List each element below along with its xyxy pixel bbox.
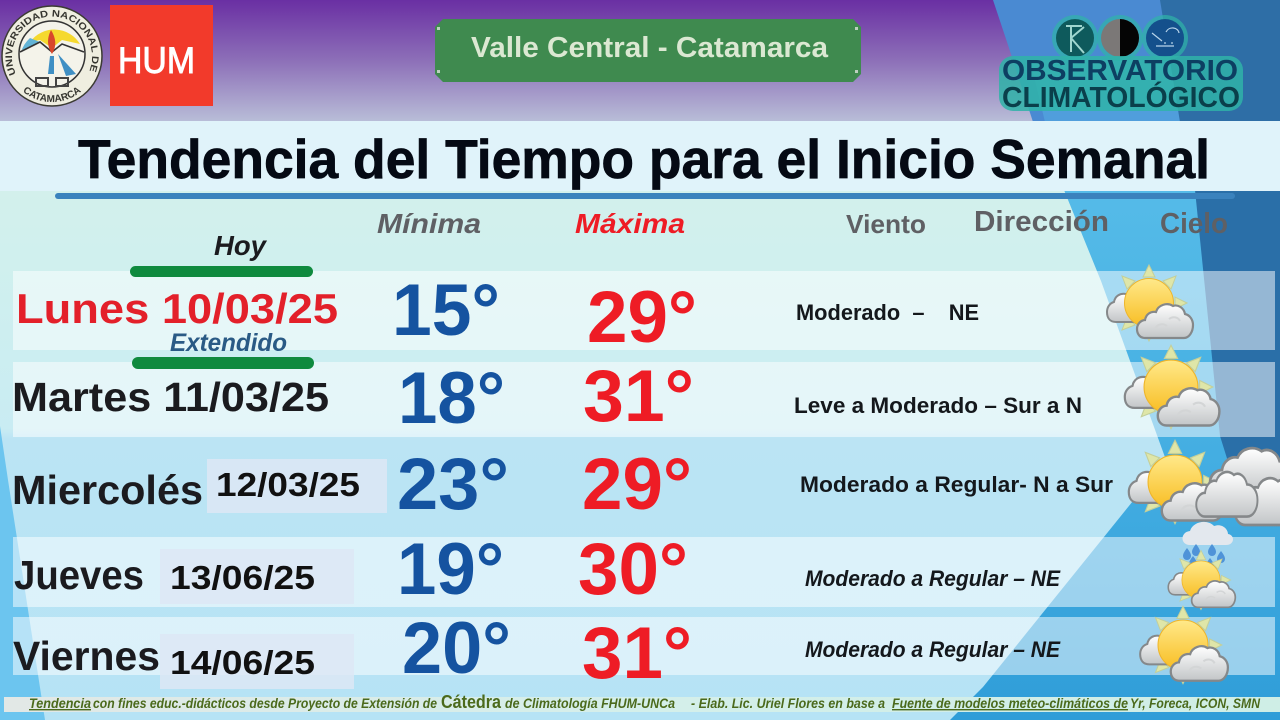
row: Miercoles: 29° [582, 444, 692, 525]
logo: Universidad Nacional de Catamarca: UNIVERSIDAD NACIONAL DE [5, 10, 99, 76]
logo: Universidad Nacional de Catamarca [1, 5, 103, 107]
column headings [377, 206, 1228, 240]
row: Viernes: Moderado a Regular – NE [805, 637, 1061, 662]
logo: HUM: HUM [118, 40, 195, 81]
row: Lunes: Moderado – NE [796, 300, 979, 325]
logo: HUM [110, 5, 213, 106]
row: Miercoles [12, 440, 1280, 525]
footer credits: con fines educ.-didácticos desde Proyecto de Extensión de [93, 695, 437, 711]
location pill: Valle Central - Catamarca [471, 32, 829, 64]
icon: sun and clouds [1129, 440, 1280, 525]
column headings: Cielo [1160, 208, 1228, 240]
row: Jueves: 19° [397, 529, 504, 610]
row: Miercoles: 23° [397, 444, 509, 525]
row: Martes: Leve a Moderado – Sur a N [794, 393, 1082, 418]
footer credits: Cátedra [441, 692, 502, 712]
row: Martes: Martes 11/03/25 [12, 374, 329, 420]
row: Lunes: Lunes 10/03/25 [16, 285, 338, 332]
column headings: Dirección [974, 206, 1109, 238]
row: Lunes: 29° [587, 277, 697, 358]
icon: sun and cloud [1125, 345, 1219, 429]
icon: sun and cloud [1140, 606, 1228, 684]
row: Miercoles: Miercolés [12, 467, 203, 513]
logo: Universidad Nacional de Catamarca: CATAMARCA [24, 87, 82, 102]
title: Tendencia del Tiempo para el Inicio Semanal [78, 128, 1210, 190]
logo: Observatorio Climatologico: CLIMATOLÓGICO [1002, 80, 1240, 114]
column headings: Mínima [377, 208, 481, 239]
footer credits: Fuente de modelos meteo-climáticos de [892, 695, 1128, 711]
column headings: Viento [846, 209, 926, 239]
row: Viernes: Viernes [13, 633, 160, 679]
location pill [435, 19, 861, 82]
row: Lunes [13, 230, 1275, 358]
row: Viernes: 20° [402, 608, 511, 689]
row: Viernes [13, 606, 1275, 694]
row: Lunes: Hoy [214, 230, 267, 261]
row: Jueves [13, 522, 1275, 610]
logo: Observatorio Climatologico [999, 15, 1243, 114]
footer credits: Tendencia [29, 695, 91, 711]
row: Viernes: 31° [582, 613, 692, 694]
row: Viernes: 14/06/25 [170, 644, 315, 681]
footer credits [4, 692, 1280, 712]
row: Jueves: Jueves [14, 552, 144, 598]
icon: sun and cloud [1107, 265, 1193, 341]
row: Jueves: Moderado a Regular – NE [805, 566, 1061, 591]
footer credits: Yr, Foreca, ICON, SMN [1130, 695, 1261, 711]
row: Jueves: 30° [578, 529, 688, 610]
row: Miercoles: 12/03/25 [216, 466, 360, 503]
column headings: Máxima [575, 208, 685, 239]
icon: rain cloud [1182, 522, 1233, 570]
row: Miercoles: Moderado a Regular- N a Sur [800, 472, 1113, 497]
row: Martes: 18° [398, 358, 505, 439]
logo: Observatorio Climatologico: OBSERVATORIO [1002, 55, 1238, 87]
row: Lunes: 15° [392, 270, 500, 351]
footer credits: - Elab. Lic. Uriel Flores en base a [691, 695, 885, 711]
row: Lunes: Extendido [170, 329, 287, 357]
footer credits: de Climatología FHUM-UNCa [505, 695, 675, 711]
row: Martes: 31° [583, 356, 694, 437]
top banner [0, 0, 1280, 122]
title band [0, 121, 1280, 199]
row: Martes [12, 345, 1275, 439]
icon: sun and cloud [1168, 550, 1235, 610]
row: Jueves: 13/06/25 [170, 559, 315, 596]
